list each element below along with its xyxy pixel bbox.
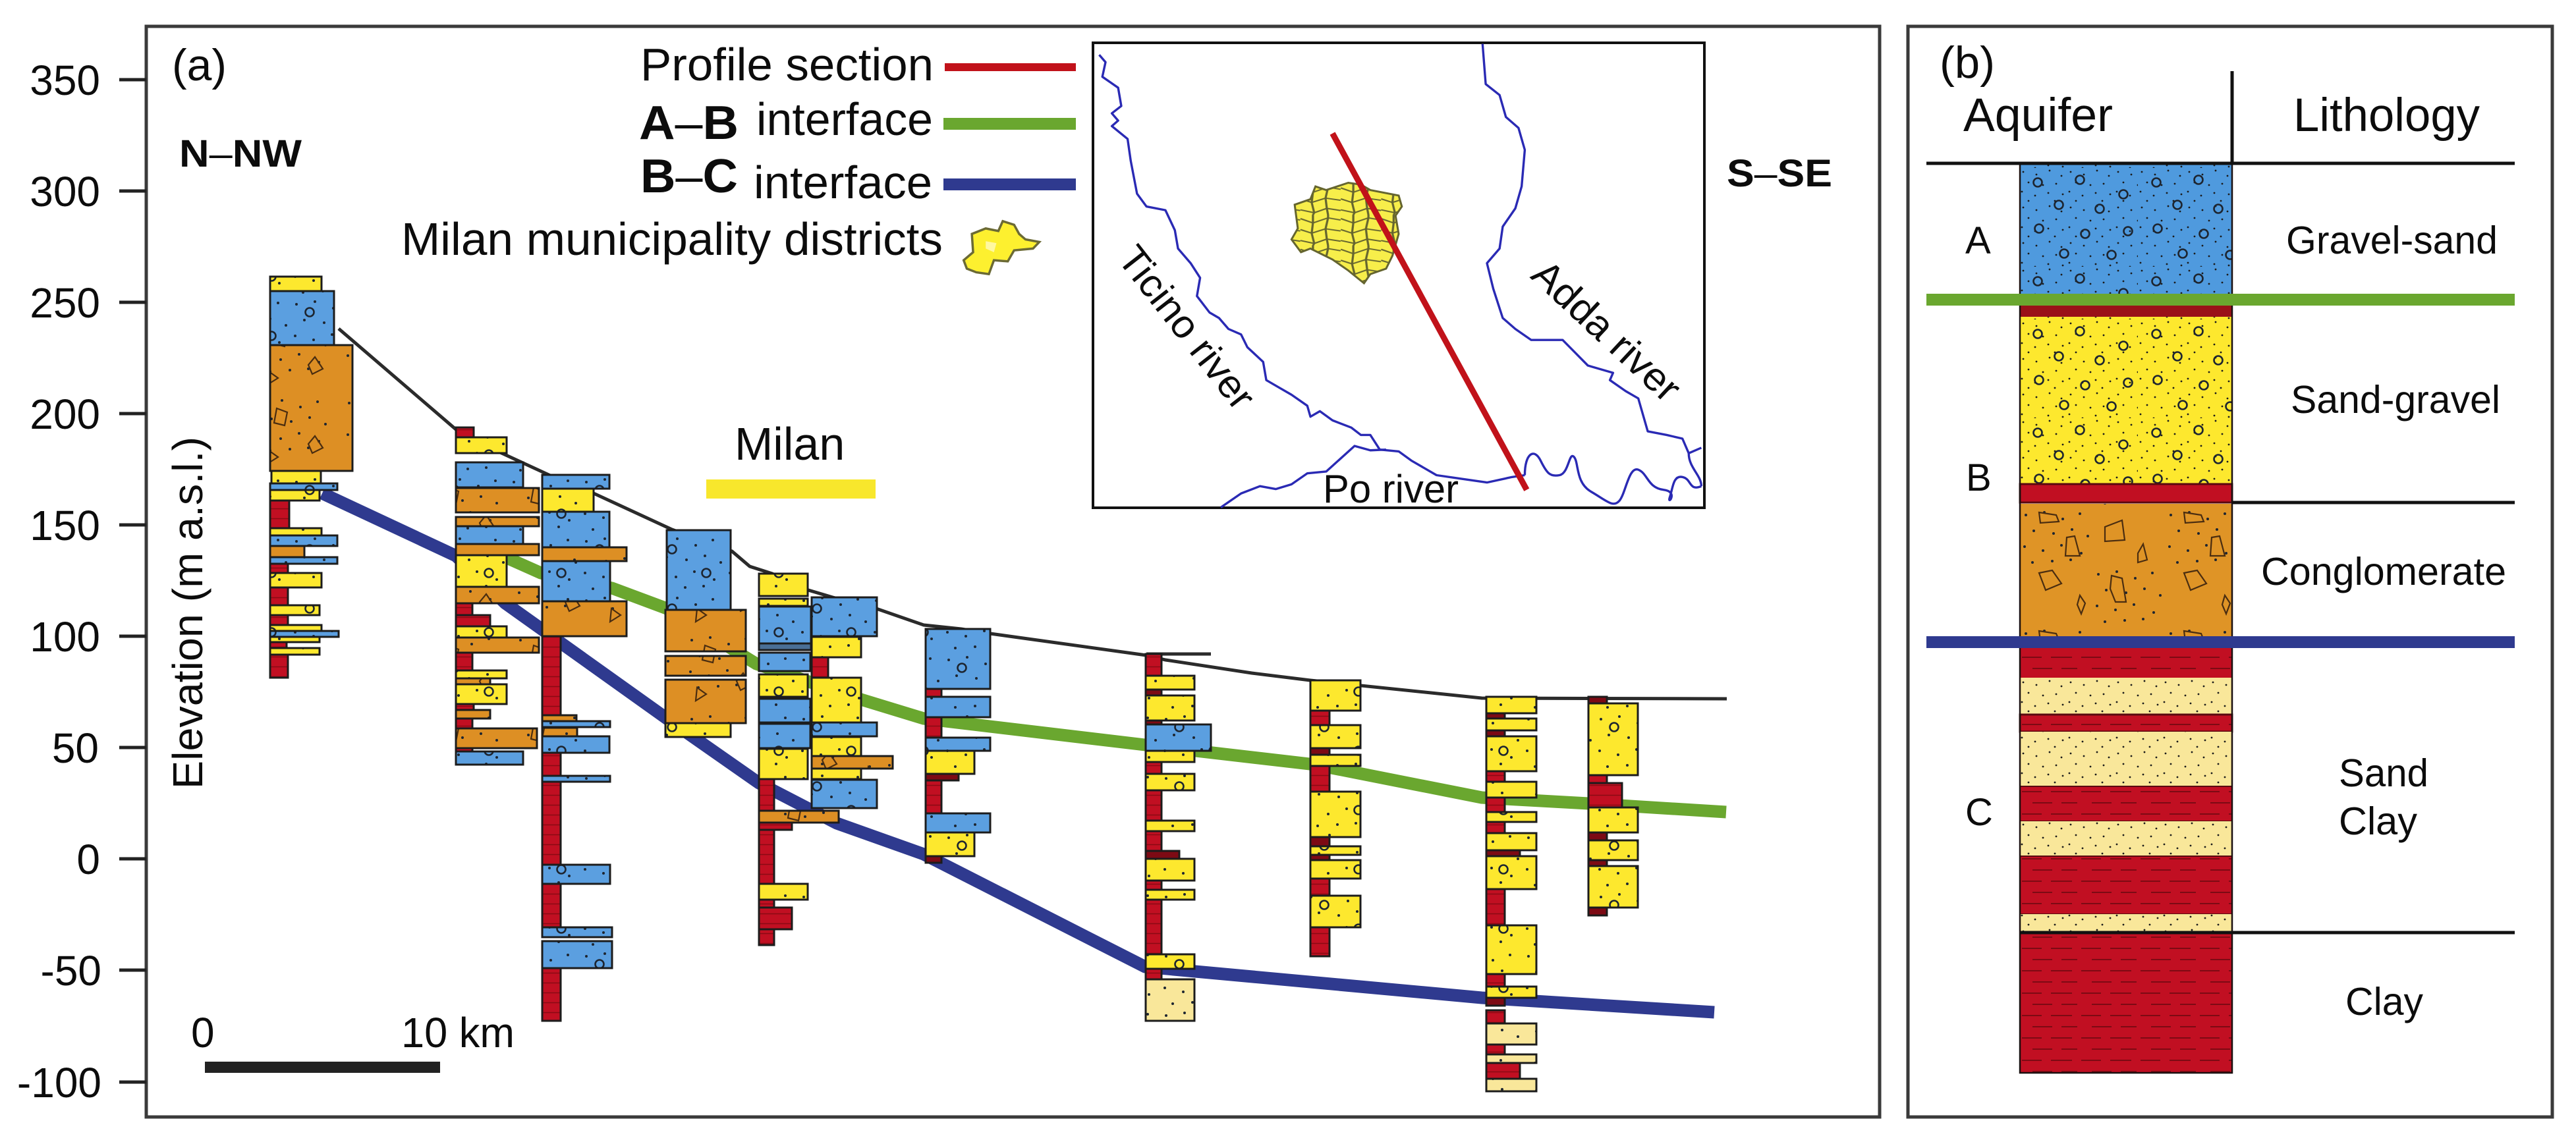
borehole column 6	[759, 597, 893, 823]
legend: A-B interface: interface	[756, 94, 933, 145]
y axis ticks and values: 350	[30, 57, 100, 104]
panel b label: (b)	[1940, 38, 1995, 88]
layer: clay 4	[2020, 856, 2232, 914]
layer: clay 2	[2020, 715, 2232, 732]
scale bar: 0	[191, 1009, 215, 1056]
borehole column 10	[1486, 697, 1536, 1091]
y axis ticks and values: -100	[17, 1059, 101, 1106]
label: Po river: Po river	[1323, 467, 1459, 511]
layer: clay 3	[2020, 786, 2232, 821]
legend: Milan municipality districts: Milan municipality districts	[401, 213, 943, 265]
y axis ticks and values	[17, 57, 146, 1106]
Ticino river line	[1099, 55, 1525, 483]
layer: sand-gravel	[2020, 317, 2232, 484]
lithology: gravel-sand: Gravel-sand	[2286, 219, 2498, 262]
Milan label and extent bar: Milan	[735, 418, 845, 470]
layer: conglomerate	[2020, 504, 2232, 639]
layer: sand 3	[2020, 821, 2232, 856]
y axis ticks and values: 0	[76, 836, 100, 883]
Po river line	[1221, 446, 1701, 507]
direction label: S-SE: S–SE	[1727, 152, 1832, 195]
lithology: sand-gravel: Sand-gravel	[2291, 378, 2500, 421]
A-B interface line	[505, 557, 1726, 812]
aquifer label A: A	[1965, 219, 1991, 262]
aquifer label B: B	[1966, 456, 1992, 499]
layer: sand 2	[2020, 732, 2232, 786]
table rules	[1926, 71, 2515, 933]
layer: clay 1	[2020, 639, 2232, 678]
borehole column 9	[1310, 680, 1360, 956]
legend: A-B interface	[639, 94, 1076, 150]
borehole column 8	[1146, 654, 1211, 1021]
lithology: conglomerate: Conglomerate	[2261, 550, 2506, 593]
layer: sand 1	[2020, 678, 2232, 715]
layer: clay band	[2020, 484, 2232, 503]
y axis ticks and values: 200	[30, 391, 100, 438]
y axis ticks and values: 50	[52, 724, 99, 772]
lithology: sand / clay	[2339, 751, 2428, 843]
y axis title: Elevation (m a.s.l.)	[164, 437, 211, 789]
legend: A-B interface: A–B	[639, 97, 739, 150]
lithology: sand / clay: Clay	[2339, 800, 2418, 843]
panel: a cross-section frame	[146, 26, 1880, 1117]
stratigraphic column	[2020, 163, 2232, 1073]
lithology: sand / clay: Sand	[2339, 751, 2428, 795]
borehole column 3	[542, 475, 627, 1021]
table header: Aquifer: Aquifer	[1963, 90, 2113, 142]
label: Ticino river: Ticino river	[1109, 237, 1264, 418]
y axis ticks and values: 100	[30, 613, 100, 661]
layer: thin clay	[2020, 304, 2232, 317]
ground surface line	[339, 329, 1727, 699]
y axis ticks and values: 150	[30, 502, 100, 549]
y axis ticks and values: -50	[41, 947, 101, 994]
borehole column 7	[926, 629, 990, 863]
borehole column 4	[665, 530, 746, 737]
legend: B-C interface: B–C	[640, 150, 738, 203]
table header: Lithology: Lithology	[2293, 90, 2480, 142]
borehole columns	[270, 277, 1638, 1091]
Adda river line	[1482, 44, 1701, 453]
Milan label and extent bar	[706, 418, 876, 499]
lithology: clay: Clay	[2345, 980, 2423, 1023]
layer: gravel-sand	[2020, 163, 2232, 295]
Milan districts map	[1291, 183, 1402, 283]
profile section line	[1333, 134, 1526, 490]
borehole column 2	[456, 427, 539, 765]
panel: b frame	[1908, 26, 2552, 1117]
inset map	[1093, 43, 1704, 511]
layer: basal clay	[2020, 932, 2232, 1073]
layer: sand 4	[2020, 914, 2232, 932]
legend: profile section: Profile section	[640, 39, 934, 90]
panel a label: (a)	[172, 40, 227, 90]
y axis ticks and values: 300	[30, 168, 100, 215]
direction label: N-NW: N–NW	[179, 132, 302, 175]
label: Adda river: Adda river	[1523, 251, 1690, 410]
borehole column 11	[1588, 697, 1638, 915]
legend: B-C interface	[640, 150, 1076, 208]
B-C interface line in column	[1926, 636, 2515, 648]
B-C interface line	[322, 493, 1714, 1012]
legend: B-C interface: interface	[754, 157, 932, 208]
borehole column 1	[270, 277, 352, 678]
borehole column 5	[759, 574, 811, 945]
aquifer label C: C	[1965, 791, 1993, 834]
scale bar	[191, 1009, 515, 1073]
scale bar: 10 km	[401, 1009, 515, 1056]
legend	[401, 39, 1076, 274]
A-B interface line in column	[1926, 294, 2515, 306]
y axis ticks and values: 250	[30, 279, 100, 327]
